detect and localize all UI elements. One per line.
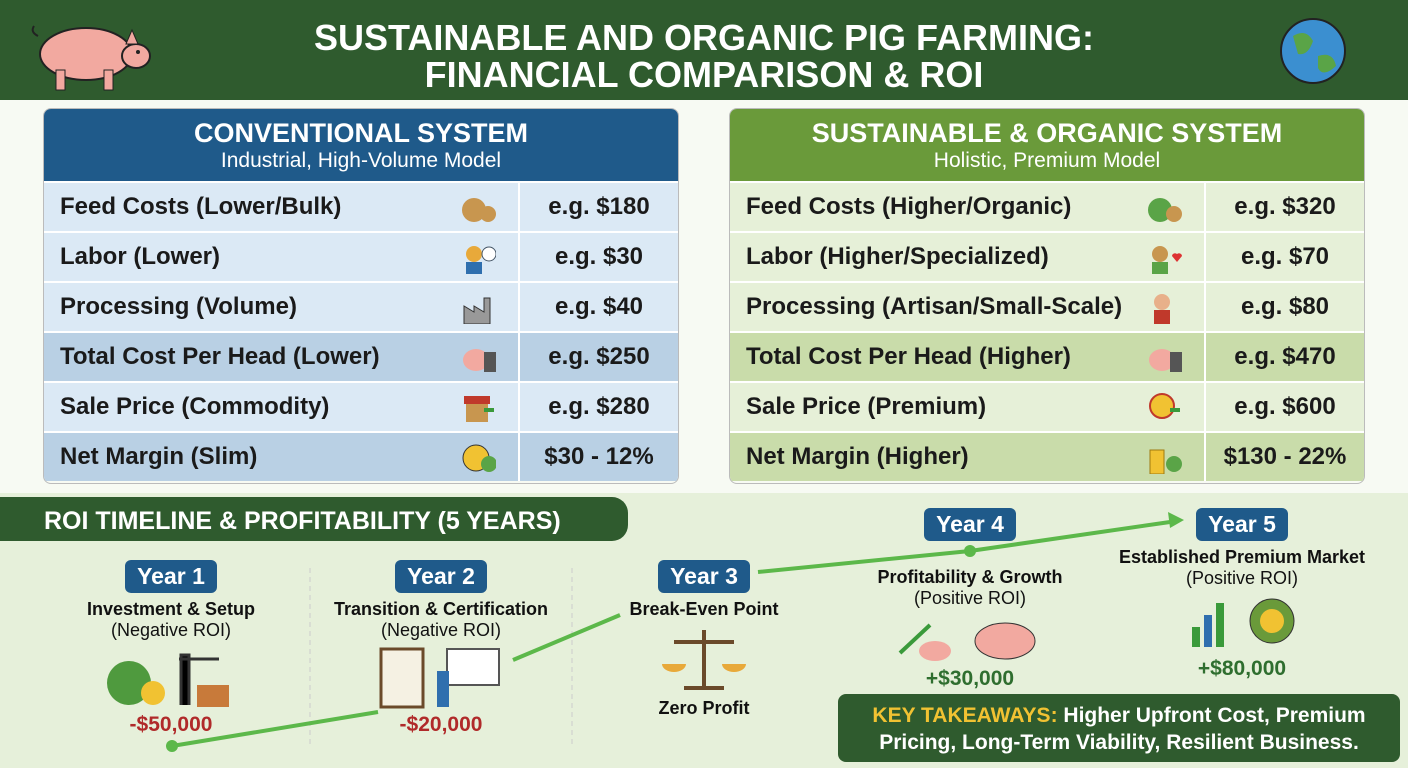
panel: conventional system: e.g. $30 (555, 243, 643, 270)
chart: ROI trend line (166, 512, 1184, 752)
panel: conventional system: Labor (Lower) (60, 243, 220, 270)
year 3: Zero Profit (658, 698, 750, 718)
panel: sustainable & organic system: Feed Costs (Higher/Organic) (746, 193, 1071, 220)
year 2: -$20,000 (400, 713, 482, 736)
callout: key takeaways: KEY TAKEAWAYS: Higher Upfront Cost, Premium Pricing, Long-Term Viability, Resilient Business. (872, 704, 1366, 754)
panel: sustainable & organic system: e.g. $320 (1234, 193, 1336, 220)
year 5: +$80,000 (1198, 657, 1286, 680)
year 2: Year 2 (407, 563, 475, 589)
bottom timeline section background (0, 493, 1408, 768)
year 4: +$30,000 (926, 667, 1014, 690)
year 4 (877, 508, 1062, 690)
panel: sustainable & organic system: e.g. $470 (1234, 343, 1336, 370)
panel header: conventional: Industrial, High-Volume Model (221, 149, 501, 172)
year 2: (Negative ROI) (381, 620, 501, 640)
year 2 (334, 560, 548, 736)
year 5: Year 5 (1208, 511, 1276, 537)
year 1: -$50,000 (130, 713, 212, 736)
panel: sustainable & organic system: Processing (Artisan/Small-Scale) (746, 293, 1122, 320)
year 5 (1119, 508, 1365, 680)
header banner (0, 0, 1408, 100)
year 1: (Negative ROI) (111, 620, 231, 640)
panel: sustainable & organic system: e.g. $70 (1241, 243, 1329, 270)
panel header: organic (730, 109, 1364, 181)
year 4: Profitability & Growth (877, 567, 1062, 587)
header banner: FINANCIAL COMPARISON & ROI (425, 54, 983, 95)
year 4: Year 4 (936, 511, 1004, 537)
panel: sustainable & organic system (729, 108, 1365, 484)
panel: conventional system: $30 - 12% (544, 443, 654, 470)
panel: sustainable & organic system: Net Margin (Higher) (746, 443, 969, 470)
year 5: Established Premium Market (1119, 547, 1365, 567)
panel: conventional system: e.g. $40 (555, 293, 643, 320)
panel: conventional system (43, 108, 679, 484)
year 3: Break-Even Point (629, 599, 779, 619)
year 1 (87, 560, 255, 736)
panel: sustainable & organic system: e.g. $80 (1241, 293, 1329, 320)
icon: globe (1280, 18, 1346, 84)
panel: conventional system: e.g. $180 (548, 193, 650, 220)
icon: pig (32, 26, 151, 90)
year 4: (Positive ROI) (914, 588, 1026, 608)
year 3: Year 3 (670, 563, 738, 589)
panel: conventional system: Feed Costs (Lower/Bulk) (60, 193, 341, 220)
header banner: SUSTAINABLE AND ORGANIC PIG FARMING: (314, 17, 1094, 58)
panel: conventional system: e.g. $250 (548, 343, 650, 370)
panel: conventional system: e.g. $280 (548, 393, 650, 420)
panel header: conventional: CONVENTIONAL SYSTEM (194, 118, 528, 148)
panel header: organic: SUSTAINABLE & ORGANIC SYSTEM (812, 118, 1282, 148)
panel: sustainable & organic system: $130 - 22% (1224, 443, 1346, 470)
year 5: (Positive ROI) (1186, 568, 1298, 588)
timeline title tab (0, 497, 628, 541)
panel: sustainable & organic system: Total Cost Per Head (Higher) (746, 343, 1071, 370)
year 3 (629, 560, 779, 718)
callout: key takeaways (838, 694, 1400, 762)
year 2: Transition & Certification (334, 599, 548, 619)
panel: conventional system: Net Margin (Slim) (60, 443, 257, 470)
panel: sustainable & organic system: Labor (Higher/Specialized) (746, 243, 1049, 270)
panel: conventional system: Sale Price (Commodity) (60, 393, 329, 420)
panel header: conventional (44, 109, 678, 181)
panel: conventional system: Total Cost Per Head (Lower) (60, 343, 380, 370)
year 1: Year 1 (137, 563, 205, 589)
year 1: Investment & Setup (87, 599, 255, 619)
panel: sustainable & organic system: e.g. $600 (1234, 393, 1336, 420)
timeline title tab: ROI TIMELINE & PROFITABILITY (5 YEARS) (44, 507, 561, 535)
panel: conventional system: Processing (Volume) (60, 293, 297, 320)
panel header: organic: Holistic, Premium Model (934, 149, 1160, 172)
panel: sustainable & organic system: Sale Price (Premium) (746, 393, 986, 420)
